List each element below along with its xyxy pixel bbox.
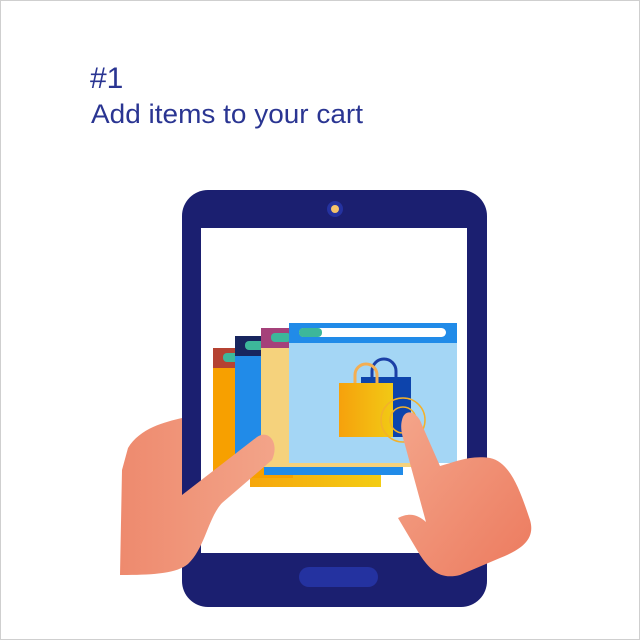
camera <box>327 201 343 217</box>
home button <box>299 567 378 587</box>
screen <box>201 228 467 553</box>
right hand <box>398 412 531 576</box>
window 4 main <box>289 323 457 463</box>
browser windows <box>213 323 457 487</box>
icon: shopping bags <box>339 359 425 442</box>
title: Add items to your cart <box>91 99 364 129</box>
left hand <box>120 418 275 575</box>
window 2 blue <box>264 465 403 475</box>
title <box>90 62 364 129</box>
window 1 orange <box>250 475 381 487</box>
window 3 pale <box>261 328 301 467</box>
title: #1 <box>90 62 123 95</box>
tablet <box>182 190 487 607</box>
